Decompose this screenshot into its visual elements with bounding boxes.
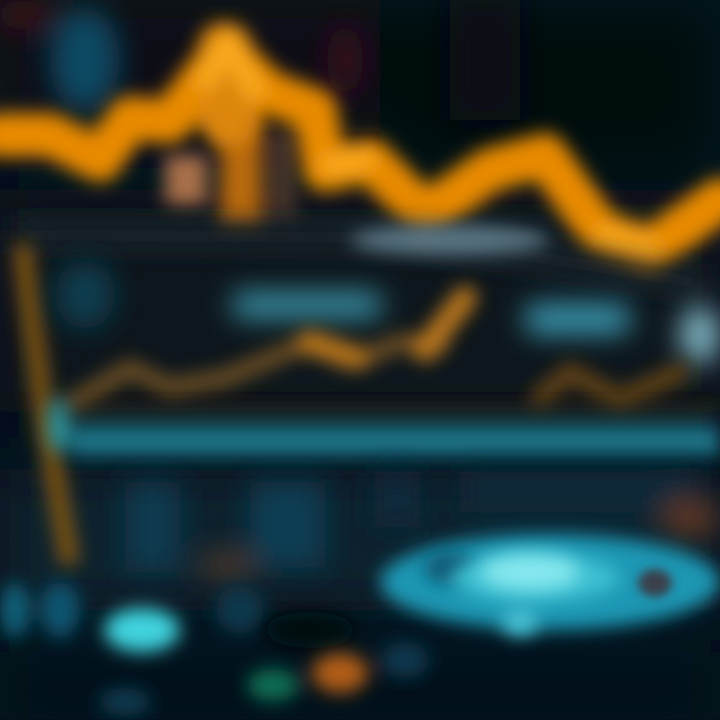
panel highlight [350, 225, 550, 255]
orange line chart [0, 42, 720, 250]
panel top band [10, 235, 710, 285]
lower-left buttons [0, 582, 264, 652]
small orange line chart [70, 298, 680, 405]
glowing cyan disc [380, 534, 720, 636]
top background shapes [0, 0, 520, 120]
left orange axis [22, 245, 70, 565]
panel right ellipse [680, 305, 720, 365]
teal band [48, 397, 720, 456]
chart panel [10, 225, 720, 565]
orange bars under the line [165, 90, 296, 225]
lower dark bars [125, 472, 720, 581]
bottom dark spot [265, 612, 355, 648]
bottom indicator lights [99, 642, 429, 716]
label blocks [55, 261, 630, 334]
